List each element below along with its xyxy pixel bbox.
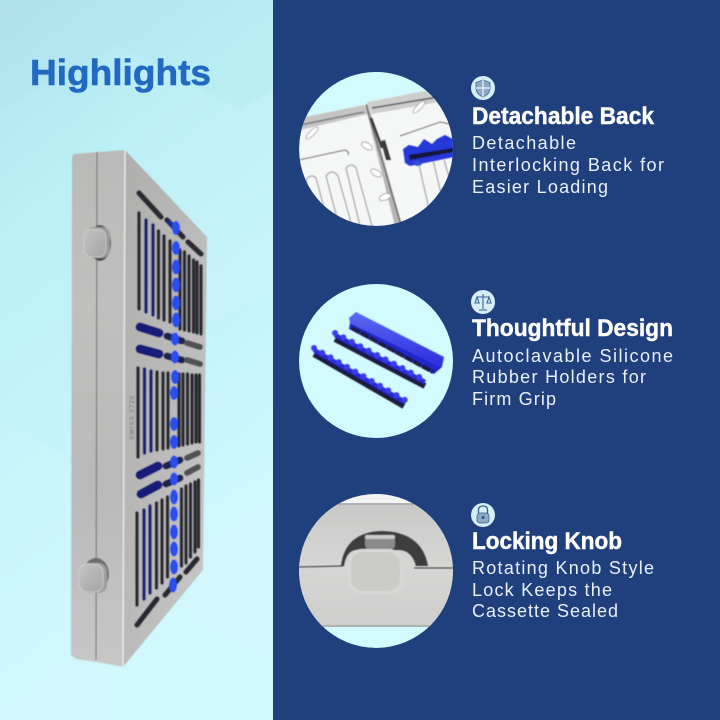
icon: balance scale — [471, 290, 495, 314]
description: Interlocking Back for — [472, 155, 664, 175]
description: Autoclavable Silicone — [472, 346, 673, 366]
description: Firm Grip — [472, 389, 556, 409]
description: Rotating Knob Style — [472, 558, 654, 578]
feature 2 circle: silicone rubber holders — [299, 284, 453, 438]
cassette side edge — [71, 150, 125, 667]
description: Easier Loading — [472, 177, 608, 197]
heading: Locking Knob: Locking Knob — [472, 528, 622, 555]
description: Rubber Holders for — [472, 367, 646, 387]
middle horizontal slots — [140, 327, 200, 364]
engraved marking: SWISS 2720 — [130, 395, 136, 440]
top slots — [139, 193, 201, 254]
product image: steel instrument cassette — [71, 150, 207, 667]
rubber holder strip: middle — [335, 333, 425, 386]
bottom slots — [137, 559, 197, 625]
heading: Detachable Back: Detachable Back — [472, 103, 655, 130]
central vertical slots — [138, 368, 200, 457]
panel: light blue left background — [0, 0, 273, 720]
lower horizontal slots — [140, 453, 198, 494]
feature 1 text block — [471, 76, 664, 197]
icon: padlock — [471, 503, 495, 527]
description: Lock Keeps the — [472, 580, 612, 600]
feature 3 circle: locking knob close-up — [299, 494, 453, 648]
upper locking knob — [84, 225, 111, 261]
lower vertical slots — [137, 480, 198, 605]
blue silicone rubber holder — [169, 221, 180, 592]
feature 3 text block — [471, 503, 654, 621]
icon: shield — [471, 76, 495, 100]
feature 1 circle: detachable back close-up — [299, 72, 453, 226]
heading: Thoughtful Design: Thoughtful Design — [472, 315, 673, 342]
lower locking knob — [79, 558, 109, 593]
rubber holder strip: flat — [349, 312, 444, 374]
feature 2 text block — [471, 290, 673, 409]
upper vertical slots — [139, 213, 201, 334]
description: Detachable — [472, 133, 576, 153]
cassette front face — [123, 150, 207, 667]
title: Highlights: Highlights — [30, 52, 211, 93]
rubber holder strip: lower — [314, 348, 405, 406]
description: Cassette Sealed — [472, 601, 618, 621]
